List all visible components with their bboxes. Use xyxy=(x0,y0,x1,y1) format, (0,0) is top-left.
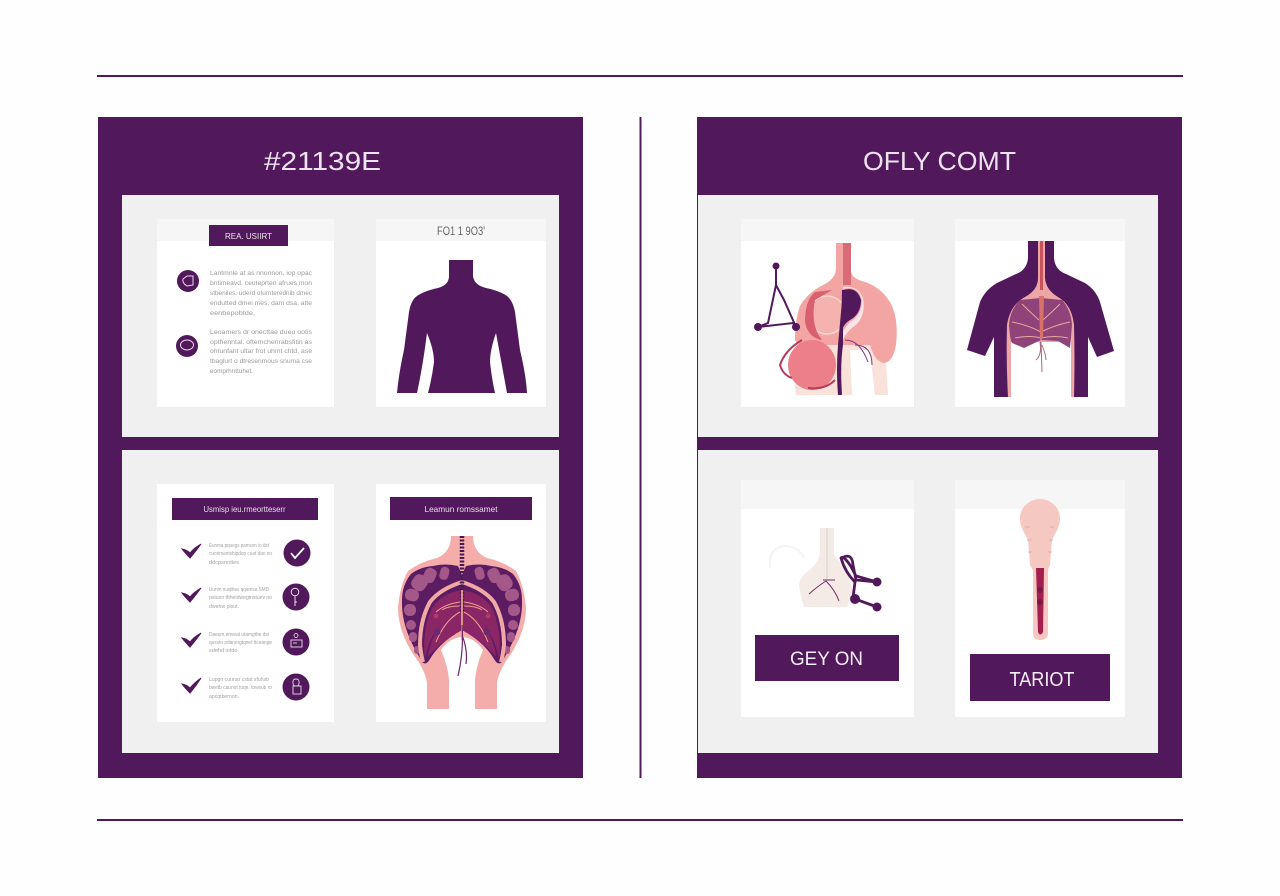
torso illustration xyxy=(967,241,1114,397)
paragraph 1 xyxy=(210,270,313,317)
check mark 2 xyxy=(182,588,201,602)
left lower section background xyxy=(122,450,559,753)
item text 4 xyxy=(209,677,272,700)
bottom rule xyxy=(97,819,1183,821)
icon: check badge xyxy=(284,540,310,566)
paragraph 2: eomprhnttuhet. xyxy=(210,368,253,375)
check mark 4 xyxy=(182,678,201,693)
paragraph 1: bntimeavd. ceuteprten afrues mon xyxy=(210,280,312,287)
label: TARIOT xyxy=(970,654,1110,701)
checklist header xyxy=(172,498,318,520)
card label: REA. USIIRT xyxy=(225,231,272,241)
card: checklist xyxy=(157,484,334,722)
paragraph 1: endutted dmei mes. dam dsa, atte xyxy=(210,300,312,307)
card: text with icons xyxy=(157,219,334,407)
item text 1 xyxy=(209,543,272,566)
bottle illustration xyxy=(799,528,882,612)
item text 2: dwehw pisut. xyxy=(209,604,239,610)
item text 4: bwetb caunot tuqe, towsub ro xyxy=(209,685,272,691)
card: bottle organ with label xyxy=(741,480,914,717)
item text 1: cuonmantshipdop cuat dao no xyxy=(209,551,272,557)
paragraph 2: opthenntal. oftemchenrabsfitin as xyxy=(210,339,313,346)
network icon xyxy=(754,262,800,331)
card: probe with label xyxy=(955,480,1125,717)
card label: FO1 1 9O3' xyxy=(437,226,485,238)
item text 3: sdehd iotdo. xyxy=(209,648,239,654)
right panel heading: OFLY COMT xyxy=(863,146,1016,176)
card header xyxy=(390,497,532,520)
icon: organ outline 2 xyxy=(176,335,198,357)
left panel heading: #21139E xyxy=(264,146,381,176)
label: GEY ON xyxy=(755,635,899,681)
item text 2 xyxy=(209,587,272,610)
item text 2: pstuon tfthetdwegtnstuev no xyxy=(209,595,272,601)
left upper section background xyxy=(122,195,559,437)
label: GEY ON: GEY ON xyxy=(790,648,863,670)
item text 4: apcqtbernon. xyxy=(209,694,239,700)
check mark 1 xyxy=(182,544,201,558)
torso shape xyxy=(397,260,527,393)
organ illustration xyxy=(754,243,897,395)
checklist header: Usmisp ieu.rmeortteserr xyxy=(204,504,286,514)
card: torso with lungs xyxy=(955,219,1125,407)
icon: document xyxy=(282,628,310,656)
card: organ anatomy xyxy=(741,219,914,407)
item text 3: Daeum enveat utamgthe dst xyxy=(209,632,269,638)
card label xyxy=(209,225,288,246)
panel: right xyxy=(697,117,1182,778)
lungs illustration xyxy=(398,536,526,709)
icon: clipboard xyxy=(282,674,310,700)
right upper section background xyxy=(698,195,1158,437)
item text 2: Uunm nuqthes qqamsa SMD xyxy=(209,587,269,593)
card: lungs diagram xyxy=(376,484,546,722)
paragraph 2 xyxy=(210,329,313,375)
card header: Leamun romssamet xyxy=(424,504,498,514)
probe illustration xyxy=(1020,499,1060,640)
card: torso silhouette xyxy=(376,219,546,407)
item text 3 xyxy=(209,632,272,654)
label: TARIOT: TARIOT xyxy=(1010,669,1074,691)
check mark 3 xyxy=(182,633,201,647)
item text 4: Lupgn cuunar cstat sfuhsb xyxy=(209,677,269,683)
panel: left xyxy=(98,117,583,778)
icon: organ outline 1 xyxy=(177,270,199,292)
item text 1: Eunma pquegs pamson io dst xyxy=(209,543,269,549)
icon: key xyxy=(282,584,310,610)
right lower section background xyxy=(698,450,1158,753)
item text 1: ddcpsnotles xyxy=(209,560,239,566)
paragraph 2: Leoamers dr onecttae dueu ootis xyxy=(210,329,313,336)
paragraph 2: ohtunfant ultar frot uhmt chtd. ase xyxy=(210,348,312,355)
paragraph 1: eenbepobtde. xyxy=(210,310,255,317)
paragraph 1: stbeniles. uderd oturnterednib dmec xyxy=(210,290,313,297)
item text 3: qusstn pdanorgtqnet ttceange xyxy=(209,640,272,646)
center divider xyxy=(640,117,642,778)
faint arc xyxy=(770,546,804,568)
paragraph 2: tbaglurt o dtresenmous snuma cse xyxy=(210,358,312,365)
paragraph 1: Lantmnle at as nnonnon, iop opac xyxy=(210,270,313,277)
top rule xyxy=(97,75,1183,77)
